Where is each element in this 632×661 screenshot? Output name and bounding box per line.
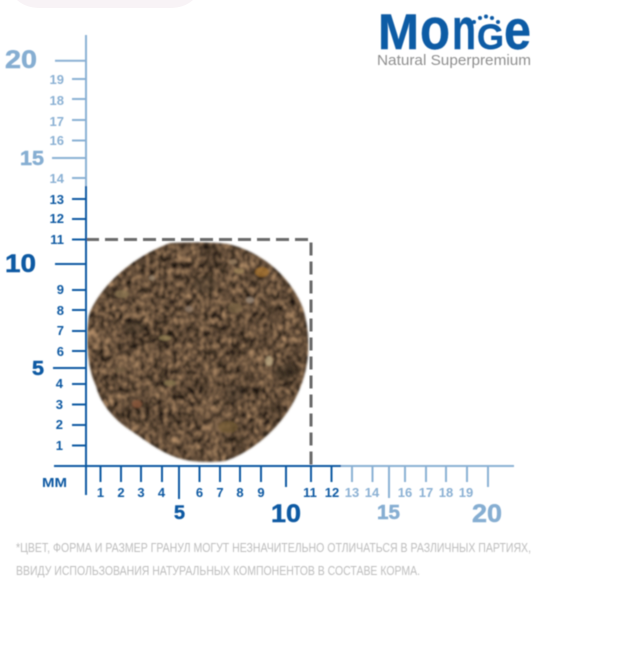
vertical axis major labels: 15: [20, 148, 44, 170]
vertical axis labels: 19: [50, 72, 64, 87]
horizontal axis labels: 1: [97, 485, 104, 500]
vertical axis labels: 18: [50, 93, 64, 108]
logo wordmark: [378, 0, 531, 62]
vertical axis labels: 9: [57, 282, 64, 297]
vertical axis labels: 11: [50, 232, 64, 247]
vertical axis major labels: 5: [32, 358, 44, 380]
vertical axis major labels: [5, 46, 44, 380]
horizontal axis labels: 19: [459, 485, 473, 500]
horizontal axis major labels: [174, 500, 502, 528]
horizontal axis labels: 6: [196, 485, 203, 500]
vertical axis major labels: 20: [5, 46, 37, 74]
horizontal axis labels: 18: [439, 485, 453, 500]
vertical axis labels: 16: [50, 133, 64, 148]
horizontal axis labels: 8: [236, 485, 244, 500]
logo wordmark: G: [477, 18, 504, 57]
horizontal axis labels: 14: [365, 485, 380, 500]
vertical axis labels: 13: [50, 192, 64, 207]
horizontal axis labels: 17: [419, 485, 433, 500]
dashed 11 mm outline: [86, 240, 311, 466]
horizontal axis labels: 16: [398, 485, 412, 500]
logo wordmark: M: [378, 4, 419, 60]
vertical axis labels: 1: [56, 438, 63, 453]
logo tagline: Natural Superpremium: [377, 53, 531, 69]
vertical axis labels: 3: [56, 397, 63, 412]
horizontal axis labels: 4: [158, 485, 166, 500]
horizontal axis major labels: 5: [174, 503, 185, 524]
vertical axis labels: 2: [56, 417, 63, 432]
vertical axis labels: 12: [50, 211, 64, 226]
kibble photo: [84, 240, 312, 464]
disclaimer text: *ЦВЕТ, ФОРМА И РАЗМЕР ГРАНУЛ МОГУТ НЕЗНАЧИТЕЛЬНО ОТЛИЧАТЬСЯ В РАЗЛИЧНЫХ ПАРТИЯХ,: [16, 541, 531, 555]
logo: Monge: [377, 0, 531, 69]
horizontal axis labels: 9: [257, 485, 265, 500]
vertical axis labels: 14: [50, 171, 65, 186]
vertical axis: [52, 35, 86, 495]
decorative top pink tab: [17, 0, 193, 8]
disclaimer text: ВВИДУ ИСПОЛЬЗОВАНИЯ НАТУРАЛЬНЫХ КОМПОНЕНТОВ В СОСТАВЕ КОРМА.: [16, 564, 420, 578]
horizontal axis labels: 2: [117, 485, 125, 500]
logo crown dots: [472, 14, 500, 24]
vertical axis labels: 8: [57, 303, 64, 318]
disclaimer text: [16, 541, 531, 578]
horizontal axis labels: 3: [137, 485, 145, 500]
unit label: ММ: [42, 475, 67, 490]
horizontal axis: [54, 466, 514, 499]
horizontal axis labels: 7: [216, 485, 224, 500]
vertical axis labels: 6: [57, 344, 64, 359]
horizontal axis labels: [97, 485, 473, 500]
vertical axis major labels: 10: [5, 250, 36, 278]
vertical axis labels: 17: [50, 114, 64, 129]
horizontal axis major labels: 20: [472, 500, 502, 528]
horizontal axis major labels: 10: [271, 500, 301, 528]
horizontal axis labels: 12: [325, 485, 339, 500]
ruler and annotations: [5, 0, 531, 578]
vertical axis labels: 4: [56, 376, 64, 391]
horizontal axis labels: 11: [303, 485, 317, 500]
horizontal axis major labels: 15: [377, 502, 400, 524]
vertical axis labels: 7: [57, 323, 64, 338]
vertical axis labels: [50, 72, 65, 453]
horizontal axis labels: 13: [345, 485, 359, 500]
